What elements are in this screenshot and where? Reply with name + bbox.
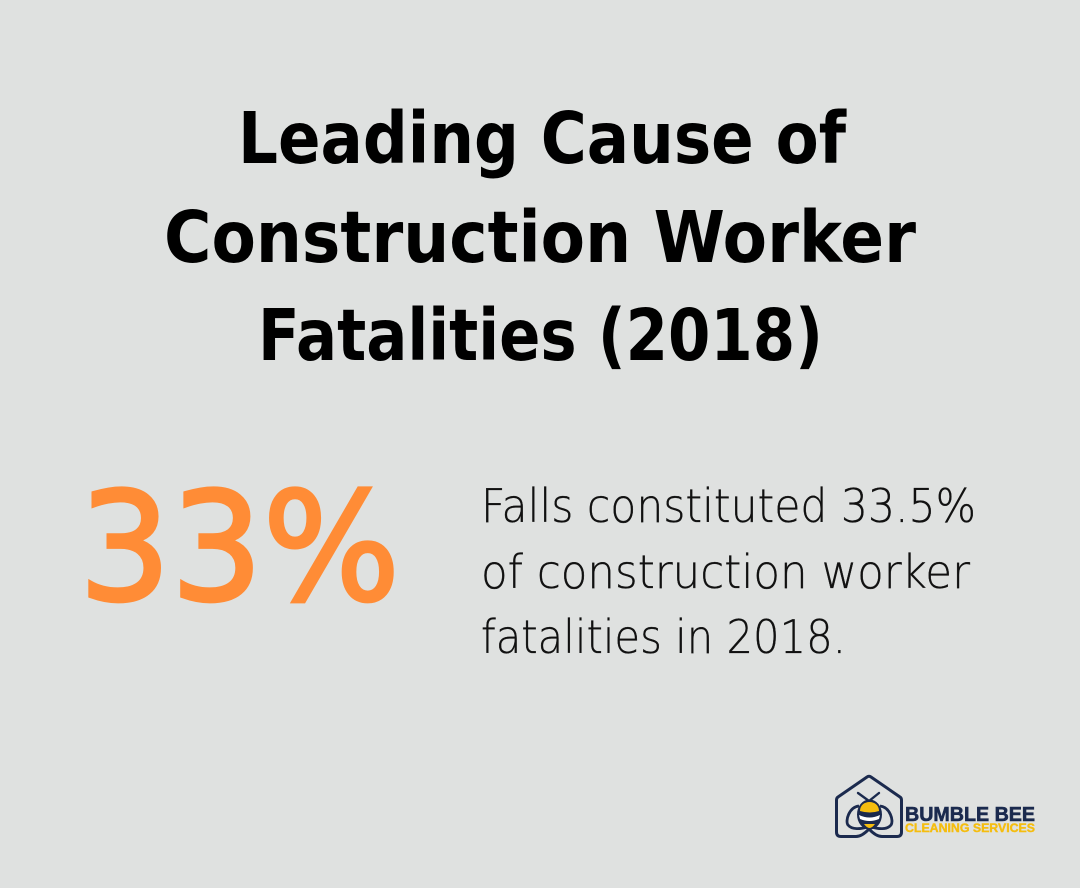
logo tagline: CLEANING SERVICES xyxy=(905,821,1035,835)
logo wordmark: BUMBLE BEE xyxy=(905,804,1035,826)
title: Fatalities (2018) xyxy=(258,294,823,377)
icon: house outline with bee xyxy=(836,776,902,836)
logo: Bumble Bee Cleaning Services xyxy=(836,776,1035,836)
description text: fatalities in 2018. xyxy=(481,610,846,664)
description text: Falls constituted 33.5% xyxy=(481,479,976,533)
title xyxy=(164,97,916,377)
description text xyxy=(481,479,976,664)
big statistic: 33%: 33% xyxy=(79,462,400,636)
description text: of construction worker xyxy=(481,545,970,599)
title: Construction Worker xyxy=(164,196,916,279)
title: Leading Cause of xyxy=(238,97,847,180)
